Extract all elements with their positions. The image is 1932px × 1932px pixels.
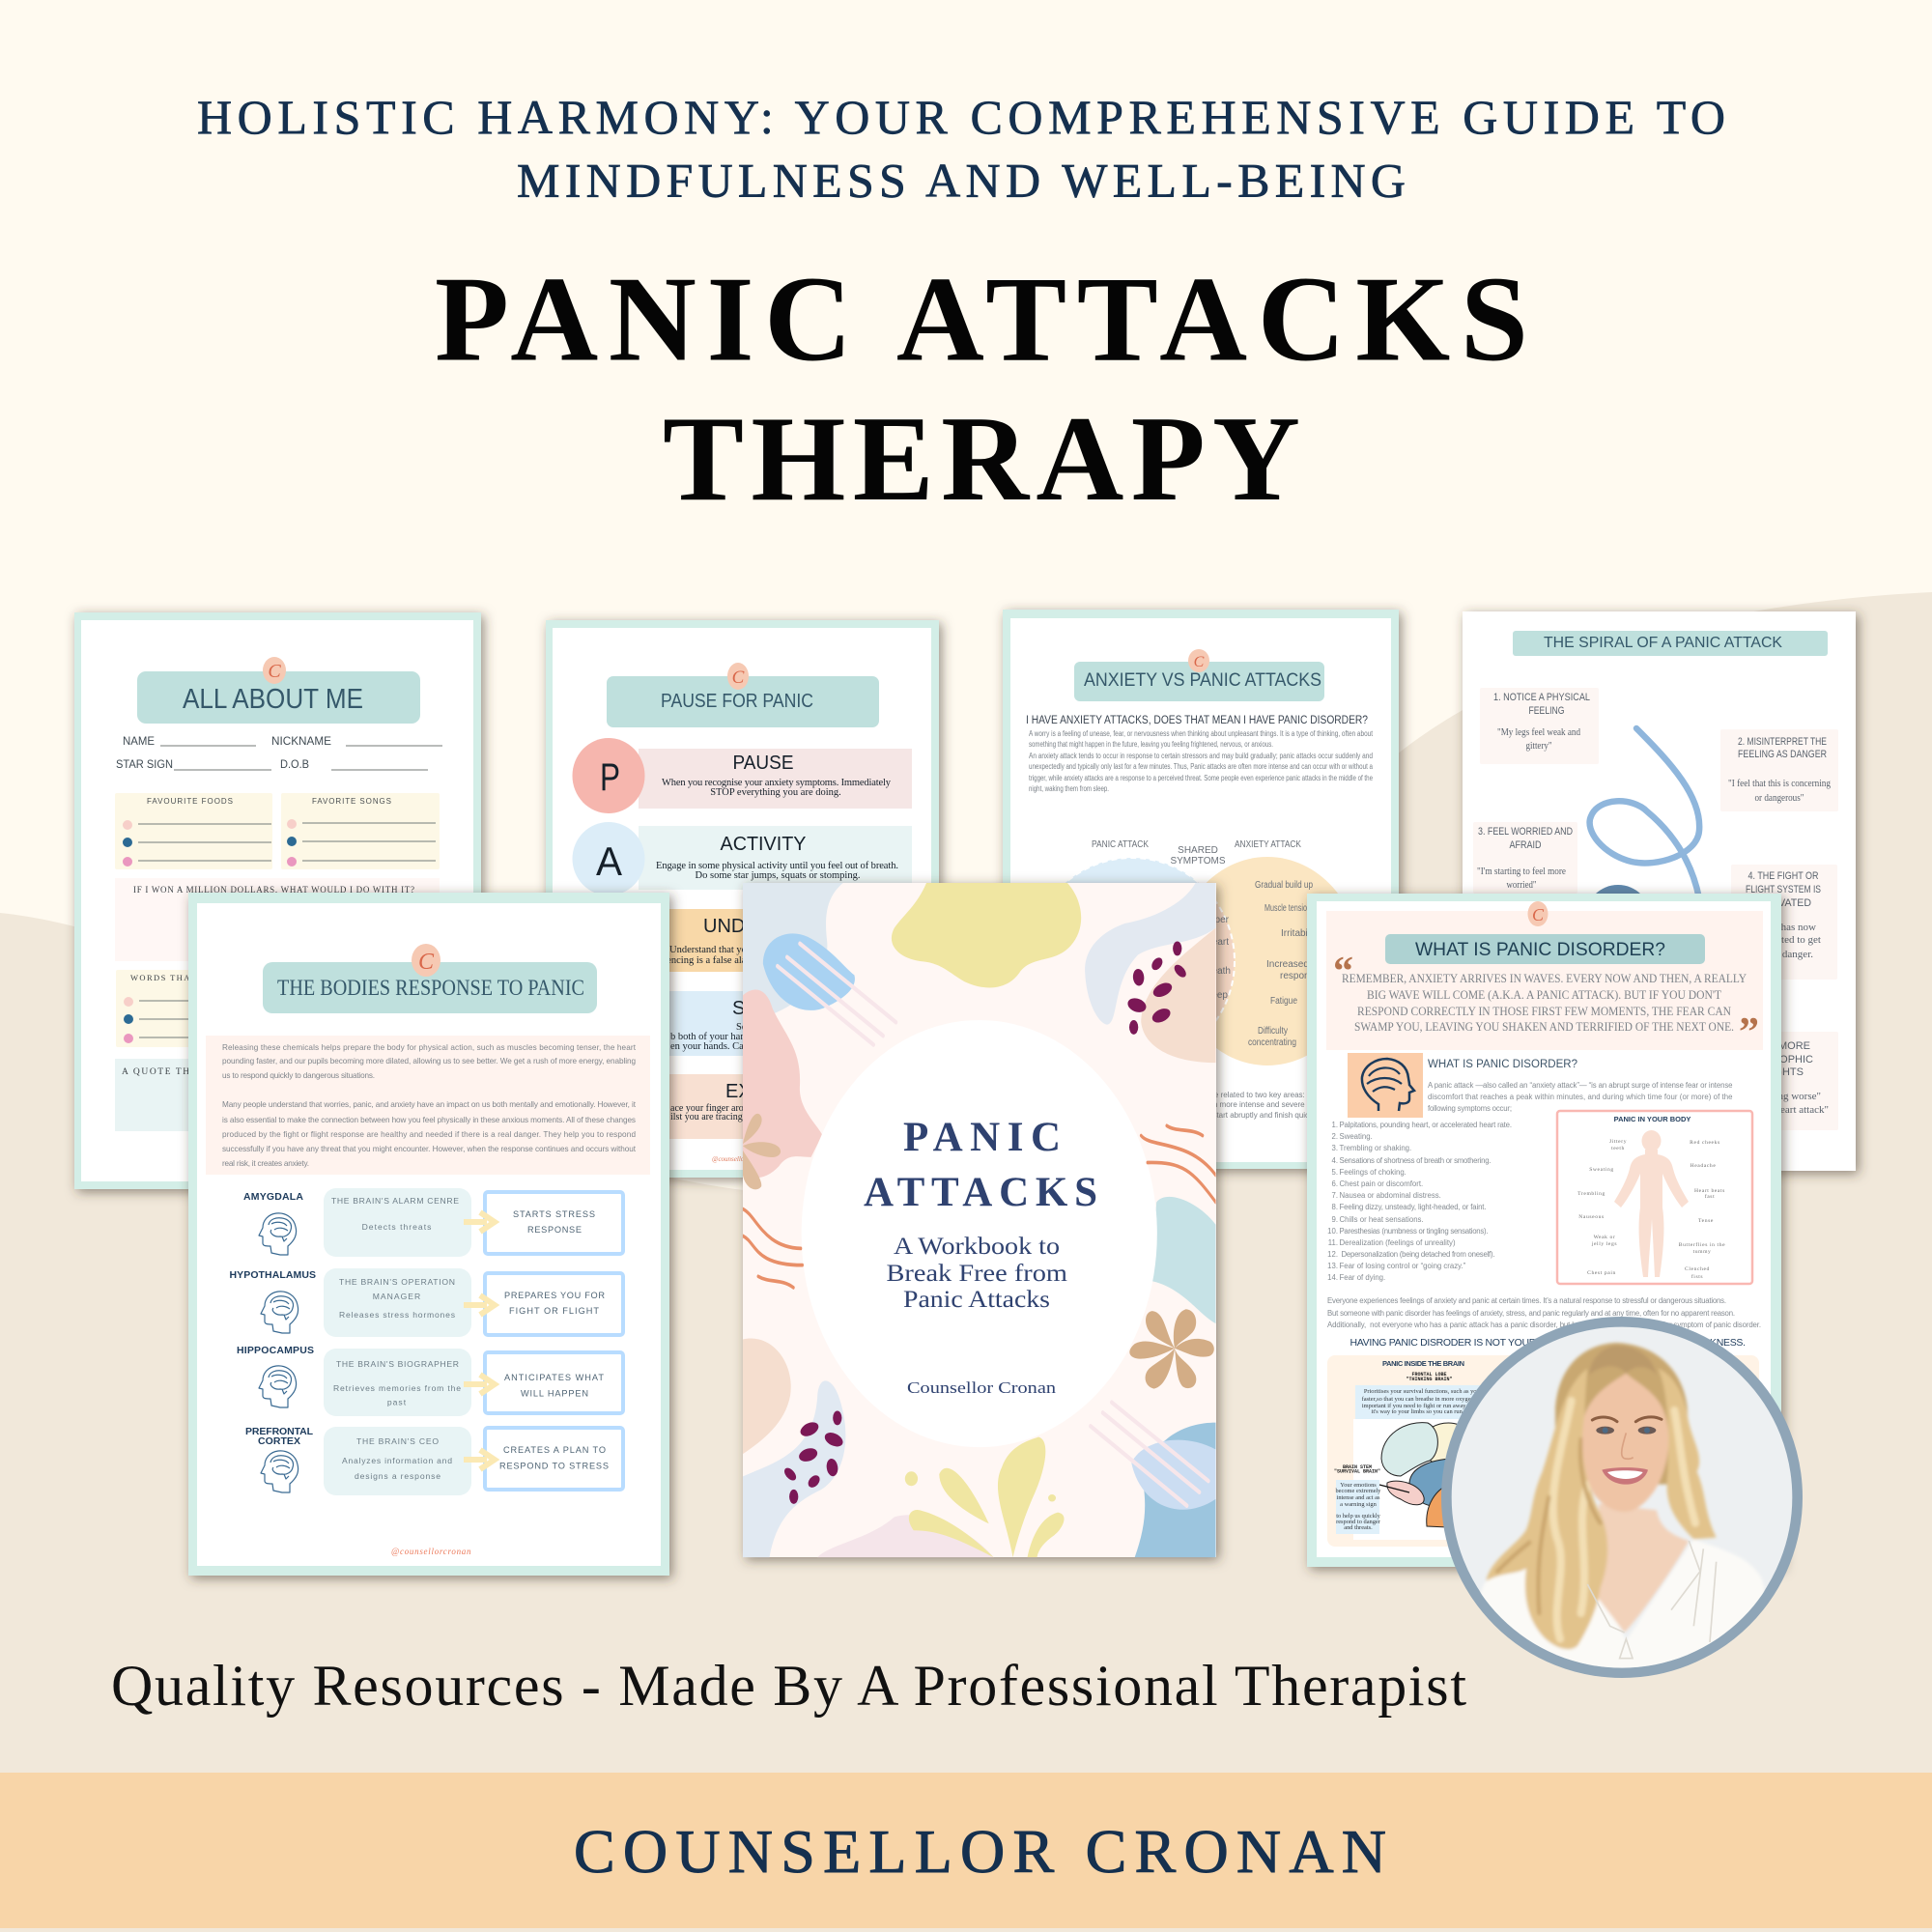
panic in your body diagram: Heart beats: [1694, 1188, 1725, 1194]
venn diagram: Increased stress: [1266, 959, 1337, 970]
panic in your body diagram: Red cheeks: [1690, 1140, 1720, 1146]
step 1: [1480, 688, 1599, 764]
venn diagram: Short of breath: [1167, 966, 1231, 977]
panel: all about me page: [74, 612, 481, 1189]
row: exhale: ilst you are tracing b: [670, 1112, 750, 1122]
explanation text: Additionally, not everyone who has a panic attack has a panic disorder, but having panic attacks is a major symptom of panic disorder.: [1327, 1321, 1761, 1329]
step 3: worried": [1507, 879, 1536, 891]
venn diagram: Racing heart: [1174, 937, 1229, 948]
intro text box: is also essential to make the connection between how you feel physically in these anxious moments. All of these changes: [222, 1116, 636, 1124]
panel: bodies response page: [188, 893, 669, 1576]
section heading and intro: [1428, 1059, 1733, 1113]
panic inside the brain: BRAIN STEM: [1343, 1464, 1372, 1470]
step 3: AFRAID: [1509, 839, 1542, 851]
panic in your body diagram: Nauseous: [1578, 1214, 1605, 1220]
heading: spiral: THE SPIRAL OF A PANIC ATTACK: [1544, 635, 1783, 651]
symptom list: Feeling dizzy, unsteady, light-headed, or faint.: [1339, 1203, 1486, 1211]
panic inside the brain: "SURVIVAL BRAIN": [1334, 1468, 1380, 1474]
step 5: CATASTROPHIC: [1731, 1054, 1813, 1065]
step 4: activated to get: [1756, 934, 1821, 946]
row: hypothalamus: THE BRAIN'S OPERATION: [339, 1277, 455, 1287]
box: favourite foods: FAVOURITE FOODS: [147, 797, 233, 806]
panic inside the brain: and threats.: [1344, 1524, 1373, 1531]
panic in your body diagram: jelly legs: [1591, 1241, 1617, 1247]
cover subtitle: Break Free from: [887, 1261, 1068, 1287]
panic in your body diagram: Headache: [1690, 1163, 1716, 1169]
intro text box: [206, 1036, 650, 1175]
row: prefrontal cortex: designs a response: [355, 1471, 440, 1481]
row: hippocampus: THE BRAIN'S BIOGRAPHER: [336, 1359, 459, 1369]
photo: therapist portrait: [1446, 1321, 1798, 1690]
step 5: 5. MORE: [1767, 1040, 1810, 1052]
intro text box: pounding faster, and our pupils becoming more dilated, allowing us to see better. We get a rush of more energy, enabling: [222, 1057, 636, 1065]
symptom list: Palpitations, pounding heart, or accelerated heart rate.: [1339, 1121, 1512, 1129]
step 2: 2. MISINTERPRET THE: [1738, 736, 1827, 748]
step 2: FEELING AS DANGER: [1738, 749, 1827, 760]
row: activity: [572, 822, 912, 895]
panic in your body diagram: Sweating: [1589, 1167, 1614, 1173]
lower text: Panic attacks are related to two key areas:: [1159, 1091, 1305, 1099]
box: quote: A QUOTE THAT INSPIRES ME: [122, 1067, 282, 1077]
footer banner: COUNSELLOR CRONAN: [574, 1817, 1386, 1886]
panel: pause for panic page: [546, 620, 939, 1178]
intro text box: Releasing these chemicals helps prepare the body for physical action, such as muscles becoming tenser, the heart: [222, 1043, 637, 1052]
quote box: C: [1532, 905, 1545, 924]
symptom list: 11.: [1328, 1238, 1338, 1247]
venn diagram: ANXIETY ATTACK: [1235, 839, 1301, 850]
symptom list: 14.: [1327, 1273, 1338, 1282]
heading: all about me: C: [268, 661, 281, 682]
form fields: NAME: [123, 736, 155, 748]
heading: anxiety vs panic: ANXIETY VS PANIC ATTACKS: [1084, 670, 1321, 691]
symptom list: 13.: [1327, 1262, 1338, 1270]
heading: bodies response: [263, 944, 597, 1013]
explanation text: Everyone experiences feelings of anxiety and panic at certain times. It’s a natural response to stressful or dangerous situations.: [1327, 1296, 1726, 1305]
step 4: [1731, 865, 1837, 980]
step 2: or dangerous": [1754, 792, 1804, 804]
step 3: "I'm starting to feel more: [1477, 866, 1566, 877]
symptom list: 3.: [1331, 1144, 1338, 1152]
box: million dollars: [115, 878, 440, 961]
symptom list: Chills or heat sensations.: [1339, 1215, 1424, 1224]
cover subtitle: [887, 1234, 1068, 1313]
symptom list: 8.: [1331, 1203, 1338, 1211]
venn diagram: Irritability: [1281, 928, 1320, 939]
panic inside the brain: "THINKING BRAIN": [1406, 1377, 1453, 1382]
panic in your body diagram: PANIC IN YOUR BODY: [1614, 1115, 1690, 1123]
step 4: ACTIVATED: [1755, 897, 1811, 909]
row: prefrontal cortex: RESPOND TO STRESS: [499, 1461, 609, 1470]
row: amygdala: RESPONSE: [527, 1225, 582, 1235]
quote box: RESPOND CORRECTLY IN THOSE FIRST FEW MOMENTS, THE FEAR CAN: [1357, 1004, 1732, 1018]
row: sensation: Squeeze: [736, 1022, 770, 1033]
row: pause: When you recognise your anxiety symptoms. Immediately: [662, 778, 892, 788]
spiral arrow: [1585, 728, 1699, 951]
symptom list: Depersonalization (being detached from oneself).: [1341, 1250, 1495, 1259]
intro text box: successfully if you have any threat that you might encounter. However, when the response continues and occurs without: [222, 1145, 637, 1153]
venn diagram: Difficulty: [1258, 1026, 1288, 1037]
heading: pause for panic: [607, 663, 879, 727]
panic in your body diagram: Trembling: [1577, 1191, 1605, 1197]
title: THERAPY: [663, 392, 1300, 526]
row: amygdala: STARTS STRESS: [513, 1209, 595, 1219]
form fields: [116, 736, 442, 771]
body text: trigger, while anxiety attacks are a response to a perceived threat. Some people even experience panic attacks in the middle of the: [1029, 774, 1373, 782]
row: hippocampus: HIPPOCAMPUS: [237, 1345, 314, 1356]
section heading and intro: WHAT IS PANIC DISORDER?: [1428, 1059, 1577, 1070]
lower text: 1. They are often more intense and severe than anxiety: [1159, 1100, 1349, 1109]
intro text box: Many people understand that worries, panic, and anxiety have an impact on us both mentally and emotionally. However, it: [222, 1100, 637, 1109]
form fields: STAR SIGN: [116, 759, 173, 771]
panel: anxiety vs panic attacks page: [1003, 610, 1399, 1169]
heading: bodies response: C: [418, 950, 435, 975]
quote box: ”: [1739, 1010, 1759, 1055]
row: pause: STOP everything you are doing.: [710, 787, 841, 798]
venn diagram: concentrating: [1248, 1037, 1296, 1048]
heading: bodies response: THE BODIES RESPONSE TO PANIC: [277, 976, 584, 1000]
form fields: NICKNAME: [271, 736, 331, 748]
subtitle: HOLISTIC HARMONY: YOUR COMPREHENSIVE GUIDE TO: [197, 90, 1725, 144]
box: million dollars: IF I WON A MILLION DOLLARS. WHAT WOULD I DO WITH IT?: [133, 885, 414, 895]
question: I HAVE ANXIETY ATTACKS, DOES THAT MEAN I HAVE PANIC DISORDER?: [1026, 715, 1368, 726]
row: sensation: en your hands. Can you: [670, 1041, 767, 1052]
row: hypothalamus: [230, 1268, 623, 1337]
step 3: 3. FEEL WORRIED AND: [1478, 826, 1573, 838]
intro text box: real risk, it creates anxiety.: [222, 1159, 309, 1168]
row: understand: experiencing is a false alarm: [641, 955, 757, 966]
row: activity: Engage in some physical activity until you feel out of breath.: [656, 861, 898, 871]
step 5: THOUGHTS: [1744, 1066, 1804, 1078]
explanation text: But someone with panic disorder has feelings of anxiety, stress, and panic regularly and at any time, often for no apparent reason.: [1327, 1309, 1735, 1318]
footer banner: [0, 1773, 1932, 1928]
venn diagram: Muscle tension: [1264, 903, 1311, 914]
row: understand: UNDERSTAND: [703, 916, 836, 937]
heading: spiral: [1513, 631, 1828, 656]
quote box: SWAMP YOU, LEAVING YOU SHAKEN AND TERRIFIED OF THE NEXT ONE.: [1354, 1019, 1734, 1034]
step 2: "I feel that this is concerning: [1728, 778, 1831, 789]
bold statement: HAVING PANIC DISRODER IS NOT YOUR FAULT AND IT IS NOT A SIGN OF WEAKNESS.: [1350, 1337, 1746, 1349]
symptom list: Trembling or shaking.: [1339, 1144, 1411, 1152]
row: understand: Understand that you are: [669, 945, 767, 955]
panic inside the brain: Prioritises your survival functions, such as your heart: [1364, 1388, 1495, 1395]
cover subtitle: Panic Attacks: [903, 1287, 1050, 1313]
heading: all about me: [137, 657, 420, 724]
body text: unexpectedly and typically only last for a few minutes. Thus, Panic attacks are often more intense and can occur with or without a: [1029, 762, 1373, 771]
row: amygdala: [243, 1188, 623, 1257]
symptom list: Sensations of shortness of breath or smothering.: [1339, 1156, 1492, 1165]
step 4: 4. THE FIGHT OR: [1748, 870, 1819, 882]
row: amygdala: THE BRAIN'S ALARM CENRE: [331, 1196, 459, 1206]
symptom list: 7.: [1331, 1191, 1338, 1200]
row: activity: Do some star jumps, squats or stomping.: [696, 870, 860, 881]
venn diagram: Poor sleep: [1181, 990, 1228, 1001]
box: favorite songs: [281, 793, 440, 869]
row: hypothalamus: Releases stress hormones: [339, 1310, 455, 1320]
venn diagram: SYMPTOMS: [1170, 856, 1226, 867]
step 2: [1720, 729, 1838, 811]
row: prefrontal cortex: THE BRAIN'S CEO: [356, 1436, 439, 1446]
panic in your body diagram: teeth: [1611, 1146, 1625, 1151]
panic in your body diagram: Clenched: [1685, 1266, 1710, 1272]
cover artwork: [743, 883, 1216, 1557]
panel: workbook cover: [743, 883, 1216, 1557]
cover subtitle: A Workbook to: [894, 1234, 1060, 1260]
symptom list: [1327, 1121, 1512, 1282]
row: activity: A: [596, 838, 622, 884]
panic inside the brain: FRONTAL LOBE: [1411, 1372, 1447, 1378]
symptom list: 12.: [1327, 1250, 1338, 1259]
symptom list: Feelings of choking.: [1339, 1168, 1406, 1177]
row: hypothalamus: HYPOTHALAMUS: [230, 1269, 316, 1281]
quote box: “: [1333, 950, 1353, 994]
body text: night, waking them from sleep.: [1029, 784, 1109, 793]
symptom list: Derealization (feelings of unreality): [1339, 1238, 1456, 1247]
box: quote: [115, 1059, 440, 1131]
panic in your body diagram: Butterflies in the: [1679, 1241, 1725, 1248]
symptom list: Fear of dying.: [1339, 1273, 1385, 1282]
panic in your body diagram: tummy: [1693, 1249, 1711, 1255]
symptom list: Chest pain or discomfort.: [1339, 1179, 1423, 1188]
venn diagram: PANIC ATTACK: [1092, 839, 1149, 850]
step 4: My brain has now: [1739, 922, 1816, 933]
venn diagram: response: [1280, 971, 1321, 981]
title: PANIC ATTACKS: [435, 253, 1528, 386]
section heading and intro: A panic attack —also called an “anxiety attack”— “is an abrupt surge of intense fear or intense: [1428, 1081, 1733, 1090]
explanation text: [1327, 1296, 1761, 1329]
row: amygdala: AMYGDALA: [243, 1191, 303, 1203]
venn diagram: SHARED: [1178, 845, 1218, 856]
row: hypothalamus: MANAGER: [373, 1292, 421, 1301]
panic in your body diagram: fast: [1705, 1193, 1715, 1200]
panic inside the brain: to help us quickly: [1336, 1513, 1381, 1520]
venn diagram: Fatigue: [1270, 996, 1297, 1007]
panic in your body diagram: [1557, 1111, 1752, 1284]
row: hypothalamus: FIGHT OR FLIGHT: [509, 1306, 599, 1316]
cover title: [864, 1115, 1097, 1215]
icon: head with thought swirl: [1348, 1053, 1423, 1118]
quote box: REMEMBER, ANXIETY ARRIVES IN WAVES. EVERY NOW AND THEN, A REALLY: [1342, 971, 1747, 985]
row: exhale: [639, 1074, 912, 1139]
symptom list: Fear of losing control or “going crazy.”: [1339, 1262, 1466, 1270]
row: prefrontal cortex: CREATES A PLAN TO: [503, 1445, 606, 1455]
symptom list: Nausea or abdominal distress.: [1339, 1191, 1441, 1200]
row: sensation: SENSES: [732, 998, 810, 1019]
section heading and intro: following symptoms occur;: [1428, 1104, 1512, 1113]
heading: all about me: ALL ABOUT ME: [183, 684, 363, 715]
row: exhale: ace your finger around: [670, 1103, 758, 1114]
quote box: WHAT IS PANIC DISORDER?: [1415, 940, 1665, 960]
row: hippocampus: past: [387, 1397, 407, 1406]
step 3: [1473, 822, 1577, 894]
panic inside the brain: it's way to your limbs so you can run faster and: [1372, 1408, 1489, 1415]
symptom list: 9.: [1331, 1215, 1338, 1224]
row: hippocampus: WILL HAPPEN: [521, 1389, 588, 1399]
box: words that describe me: [116, 970, 440, 1047]
panic inside the brain: respond to danger: [1336, 1519, 1381, 1525]
step 5: "I'm having a heart attack": [1716, 1104, 1829, 1116]
row: activity: ACTIVITY: [721, 834, 806, 855]
box: words that describe me: WORDS THAT DESCRIBE ME: [130, 973, 269, 982]
row: amygdala: Detects threats: [362, 1222, 432, 1232]
lower text: [1159, 1091, 1349, 1120]
row: sensation: [639, 991, 912, 1056]
row: pause: PAUSE: [732, 753, 794, 774]
row: pause: P: [600, 756, 620, 799]
intro text box: produced by the fight or flight response are healthy and needed if there is a real danger. They help you to respond: [222, 1130, 636, 1139]
venn diagram: [1065, 840, 1338, 1065]
symptom list: 10.: [1327, 1227, 1338, 1236]
handle: @counsellorcronan: [712, 1155, 766, 1163]
panel: spiral of a panic attack page: [1463, 611, 1856, 1171]
lower text: 2. They tend to start abruptly and finish quickly fussat: [1159, 1111, 1342, 1120]
row: prefrontal cortex: Analyzes information and: [342, 1456, 452, 1465]
heading: anxiety vs panic: [1074, 649, 1324, 701]
step 1: FEELING: [1528, 705, 1565, 717]
section heading and intro: discomfort that reaches a peak within minutes, and during which time four (or more) of the: [1428, 1093, 1733, 1101]
panic inside the brain: faster,so that you can breathe in more oxygen, which is: [1362, 1396, 1498, 1403]
panic in your body diagram: Weak or: [1594, 1235, 1615, 1240]
subtitle: [197, 90, 1725, 207]
panic inside the brain: a warning sign: [1340, 1501, 1378, 1508]
title: [435, 253, 1528, 526]
venn diagram: Gradual build up: [1255, 880, 1313, 891]
venn diagram: Sweaty, hyper: [1168, 915, 1230, 925]
cover title: PANIC: [903, 1115, 1061, 1160]
step 5: [1716, 1032, 1838, 1130]
panic in your body diagram: Chest pain: [1587, 1270, 1616, 1276]
panel: what is panic disorder page: [1307, 894, 1781, 1567]
body text: [1029, 729, 1374, 793]
body text: something that might happen in the future, leaving you feeling frightened, nervous, or anxious.: [1029, 740, 1273, 749]
row: hippocampus: ANTICIPATES WHAT: [504, 1373, 604, 1382]
row: pause: [572, 738, 912, 813]
symptom list: Sweating.: [1339, 1132, 1373, 1141]
handle: @counsellorcronan: [391, 1547, 471, 1556]
cover title: ATTACKS: [864, 1170, 1097, 1215]
panic in your body diagram: Jittery: [1609, 1139, 1627, 1145]
row: prefrontal cortex: PREFRONTAL: [245, 1426, 314, 1437]
heading: anxiety vs panic: C: [1194, 654, 1205, 670]
cover author: Counsellor Cronan: [907, 1378, 1057, 1397]
step 1: 1. NOTICE A PHYSICAL: [1493, 692, 1590, 703]
tagline: Quality Resources - Made By A Professional Therapist: [111, 1654, 1466, 1718]
symptom list: 4.: [1331, 1156, 1338, 1165]
symptom list: 6.: [1331, 1179, 1338, 1188]
row: sensation: b both of your hands: [670, 1032, 754, 1042]
subtitle: MINDFULNESS AND WELL-BEING: [517, 153, 1406, 207]
symptom list: 5.: [1331, 1168, 1338, 1177]
intro text box: us to respond quickly to dangerous situations.: [222, 1071, 375, 1080]
symptom list: Paresthesias (numbness or tingling sensations).: [1339, 1227, 1488, 1236]
row: hippocampus: Retrieves memories from the: [333, 1383, 461, 1393]
box: favorite songs: FAVORITE SONGS: [312, 797, 391, 806]
row: prefrontal cortex: [245, 1426, 623, 1495]
body text: An anxiety attack tends to occur in response to certain stressors and may build gradually; panic attacks occur suddenly and: [1029, 752, 1373, 760]
panic in your body diagram: Tense: [1698, 1218, 1714, 1224]
step 4: FLIGHT SYSTEM IS: [1746, 884, 1821, 895]
panic inside the brain: [1327, 1355, 1759, 1547]
form fields: D.O.B: [280, 759, 309, 771]
panic in your body diagram: fists: [1691, 1273, 1703, 1280]
panic inside the brain: intense and act as: [1337, 1494, 1380, 1501]
step 4: ready for danger.: [1741, 949, 1813, 960]
row: prefrontal cortex: CORTEX: [258, 1435, 300, 1447]
step 5: "It is getting worse": [1736, 1091, 1821, 1102]
box: favourite foods: [115, 793, 272, 869]
step 1: "My legs feel weak and: [1497, 726, 1580, 738]
symptom list: 1.: [1331, 1121, 1338, 1129]
quote box: BIG WAVE WILL COME (A.K.A. A PANIC ATTACK). BUT IF YOU DON'T: [1367, 987, 1721, 1002]
row: understand: [639, 909, 912, 972]
row: hypothalamus: PREPARES YOU FOR: [504, 1291, 605, 1300]
row: exhale: EXHALE: [725, 1081, 802, 1102]
panic inside the brain: important if you need to fight or run away. More blood: [1362, 1403, 1498, 1409]
step 1: gittery": [1526, 740, 1551, 752]
heading: pause for panic: C: [732, 668, 745, 688]
panic inside the brain: Your emotions: [1340, 1482, 1377, 1489]
heading: pause for panic: PAUSE FOR PANIC: [661, 691, 813, 712]
row: hippocampus: [237, 1345, 623, 1416]
symptom list: 2.: [1331, 1132, 1338, 1141]
panic inside the brain: become extremely: [1335, 1488, 1381, 1494]
panic inside the brain: PANIC INSIDE THE BRAIN: [1382, 1359, 1464, 1368]
quote box: [1326, 901, 1763, 1055]
body text: A worry is a feeling of unease, fear, or nervousness when thinking about unpleasant things. It is a type of thinking, often about: [1029, 729, 1374, 738]
